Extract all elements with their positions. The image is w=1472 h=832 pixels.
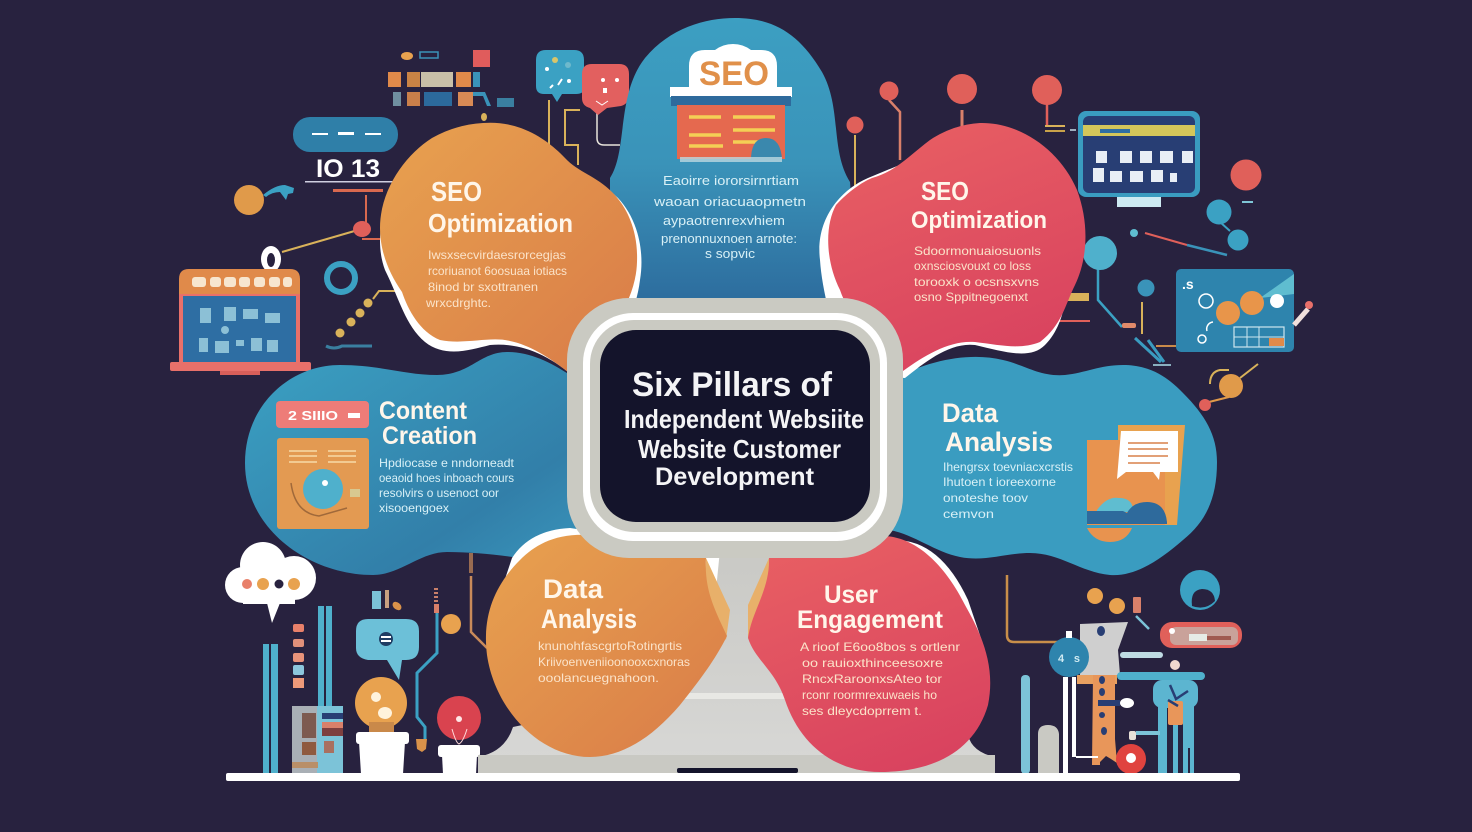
body text: oxnsciosvouxt co loss [914,259,1031,273]
icon: orange circle with teal tag [234,185,294,215]
body text: osno Sppitnegoenxt [914,290,1029,304]
body text: onoteshe toov [943,491,1028,505]
body text [653,173,806,261]
lower-right illustration [1007,570,1242,774]
body text: waoan oriacuaopmetn [653,194,806,209]
body text: A rioof E6oo8bos s ortlenr [800,640,960,654]
panel: seo optimization orange [380,123,641,378]
connector with red node [282,221,382,252]
body text: knunohfascgrtoRotingrtis [538,639,682,653]
body text: Sdoormonuaiosuonls [914,244,1041,258]
panel: seo optimization red [819,123,1085,378]
body text: resolvirs o usenoct oor [379,486,499,500]
icon: orange bulb node [1199,364,1258,411]
lower-left illustration [225,542,487,774]
panel: data analysis right [890,357,1217,575]
ground line [226,773,1240,781]
icon: machine with figures: 4 s [1058,653,1080,665]
body text: ooolancuegnahoon. [538,671,659,685]
body text: cemvon [943,507,994,521]
heading: Data [942,398,999,428]
title: Website Customer [638,434,841,464]
body text: Ihengrsx toevniacxcrstis [943,460,1073,474]
body text: rcoriuanot 6oosuaa iotiacs [428,264,567,278]
body text [914,244,1041,304]
icon: dotted connector [326,291,409,348]
heading: Optimization [911,207,1047,234]
icon: chat bubbles with connector lines [536,50,629,165]
icon: seo storefront [670,44,792,162]
body text: RncxRaroonxsAteo tor [802,672,942,686]
title: Independent Websiite [624,404,864,434]
icon: analytics card with coins [1176,269,1313,352]
icon: status pill and counter: IO 13 [316,155,380,183]
icon: cloud speech bubble [225,542,316,623]
heading [541,574,637,634]
body text: aypaotrenrexvhiem [663,213,785,228]
icon: folder with chat note [1087,425,1185,542]
body text: prenonnuxnoen arnote: [661,231,797,246]
monitor stand [478,550,995,773]
body text [538,639,690,685]
icon: laptop dashboard [170,246,311,375]
body text: wrxcdrghtc. [425,296,491,310]
heading: SEO [431,176,482,207]
icon: red bulb in pot [437,696,481,774]
body text: Ihutoen t ioreexorne [943,475,1056,489]
icon: speech bubble teal [356,590,419,680]
icon: teal ring [327,264,355,292]
title: Six Pillars of [632,366,833,404]
icon: analytics card with coins: .s [1182,276,1194,292]
icon: desktop monitor top right [1078,111,1200,207]
body text: Hpdiocase e nndorneadt [379,456,515,470]
body text: 8inod br sxottranen [428,280,538,294]
heading [797,581,944,634]
icon: status pill and counter [293,117,398,223]
panel: data analysis orange [486,528,730,757]
body text [800,640,960,718]
body text: s sopvic [705,246,756,261]
body text [379,456,515,515]
icon: pipe connector [1007,575,1066,642]
heading: Data [543,574,604,604]
icon: teal pillars and blocks [263,606,343,774]
body text: Kriivoenveniioonooxcxnoras [538,655,690,669]
icon: machine with figures [1021,622,1205,774]
title [624,366,864,491]
heading: Content [379,397,468,425]
heading: Creation [382,422,477,450]
body text: ses dleycdoprrem t. [802,704,922,718]
top-left decorative icons: tile cluster [388,50,514,121]
icon: seo storefront: SEO [699,55,769,93]
connector with teal balloon [1058,236,1176,366]
heading: User [824,581,878,609]
panel: user engagement red [748,536,990,772]
icon: floating circles and links [1130,160,1262,255]
top-right pins [846,74,1076,190]
icon: circuit connector [416,553,487,752]
body text: rconr roormrexuwaeis ho [802,688,937,702]
icon: floating coins and crescent [1087,570,1220,629]
body text: torooxk o ocsnsxvns [914,275,1039,289]
icon: content creation card [276,401,369,529]
heading: Analysis [945,427,1053,457]
central monitor [567,298,903,558]
icon: orange bulb in pot [355,677,409,774]
heading: Optimization [428,208,573,238]
heading [379,397,477,450]
title: Development [655,463,815,491]
heading: SEO [921,176,969,206]
panel: top seo blue [610,18,860,310]
icon: standing person [1116,660,1198,774]
body text: oeaoid hoes inboach cours [379,471,514,485]
body text: Iwsxsecvirdaesrorcegjas [428,248,566,262]
body text [425,248,567,310]
heading: Analysis [541,604,637,634]
heading: Engagement [797,606,944,634]
body text: oo rauioxthinceesoxre [802,656,943,670]
panel: content creation [245,352,585,575]
icon: red search pill [1160,622,1242,648]
heading [942,398,1053,457]
icon: content creation card: 2 SIIIO [288,408,338,423]
body text: Eaoirre iororsirnrtiam [663,173,799,188]
body text [943,460,1073,521]
body text: xisooengoex [379,501,449,515]
heading [428,176,573,238]
heading [911,176,1047,234]
